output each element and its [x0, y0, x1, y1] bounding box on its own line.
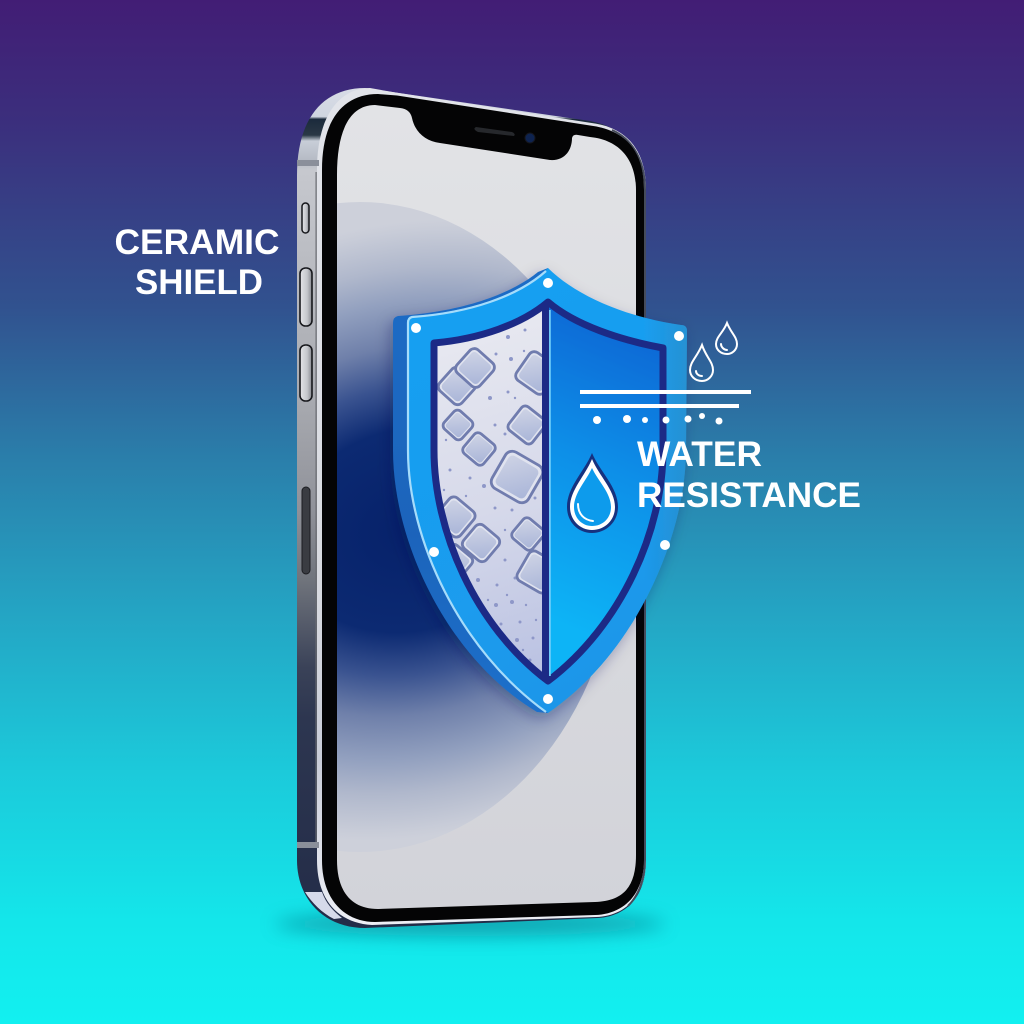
label: ceramic shield: [114, 223, 280, 302]
rim rivets: [411, 278, 684, 704]
black bezel: [322, 94, 644, 922]
label: water resistance: [637, 435, 861, 515]
rim highlight: [408, 271, 546, 712]
shield 3D side: [393, 268, 548, 713]
side button: volume down: [300, 345, 312, 401]
water half: [548, 300, 663, 681]
shield front rim: [407, 268, 687, 713]
icon: water-repellent surface lines and beads: [580, 390, 751, 424]
smartphone: [297, 88, 646, 928]
icon: water drop on shield: [567, 453, 618, 533]
ceramic half: [434, 300, 548, 681]
polished frame rim: [317, 88, 646, 925]
side slot: [302, 487, 310, 574]
screen: [337, 105, 636, 909]
dark right edge of frame: [612, 130, 645, 906]
side button: volume up: [300, 268, 312, 326]
label: water resistance: WATER: [637, 435, 762, 474]
wallpaper blue glow: [337, 202, 591, 837]
ceramic crystal tiles: [438, 347, 542, 594]
rim fade over background: [657, 321, 687, 574]
navy inner outline: [434, 302, 663, 681]
phone ground shadow: [275, 912, 665, 936]
centre divider: [542, 304, 549, 681]
frame antenna bands: [297, 160, 319, 848]
label: water resistance: RESISTANCE: [637, 476, 861, 515]
side button: mute switch: [302, 203, 309, 233]
icon: small water drops: [690, 323, 737, 381]
divider highlight: [549, 310, 551, 676]
shield: [393, 268, 688, 713]
ceramic texture dots: [443, 328, 537, 662]
label: ceramic shield: CERAMIC: [114, 223, 280, 262]
side frame seam: [316, 172, 317, 844]
front camera: [525, 133, 535, 143]
bottom corner light patch: [305, 892, 342, 919]
label: ceramic shield: SHIELD: [135, 263, 263, 302]
notch speaker: [474, 127, 515, 136]
phone body: [297, 88, 646, 928]
